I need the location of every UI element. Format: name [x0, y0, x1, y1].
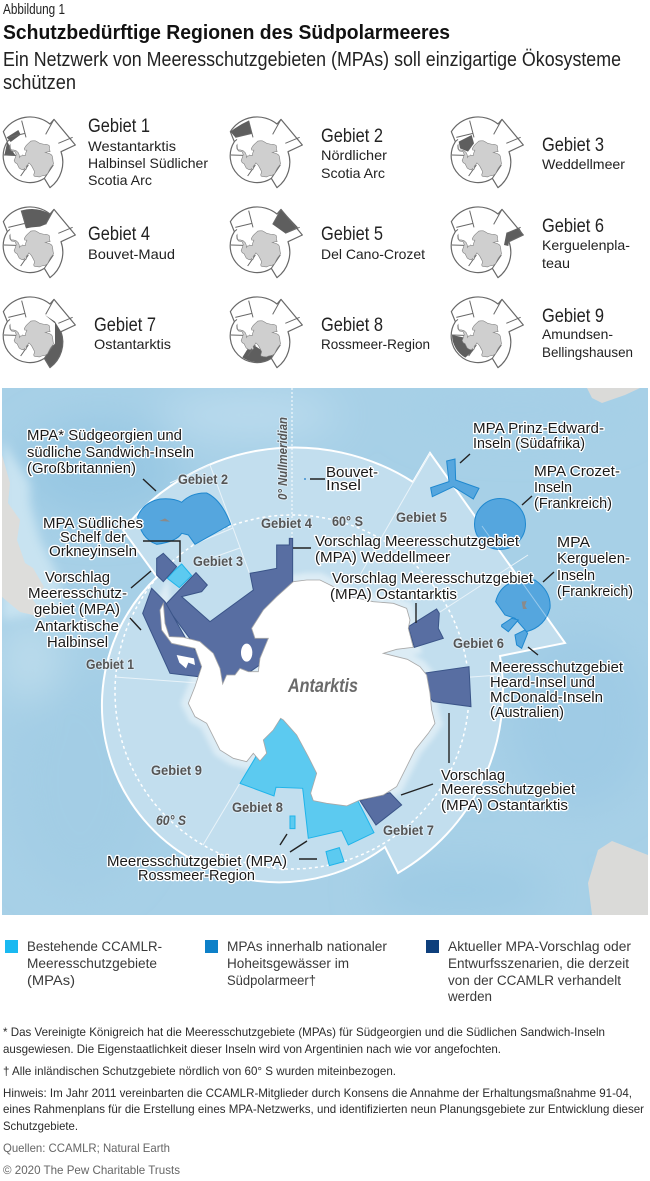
area labels: Gebiet 3: [193, 554, 243, 569]
note: eines Rahmenplans für die Erstellung eines MPA-Netzwerks, und identifizierten neun Planungsgebiete zur Entwicklung dieser: [3, 1102, 644, 1116]
proposed MPA: Orkney: [157, 553, 177, 582]
footnote: asterisk: [3, 1025, 605, 1056]
callout: Rossmeer: Meeresschutzgebiet (MPA): [107, 854, 287, 870]
callout: Kerguelen: MPA: [557, 535, 590, 551]
region boundary over Crozet and Kerguelen: [482, 526, 547, 618]
MPA: Ross Sea: [240, 717, 374, 845]
callout: Crozet: [534, 464, 620, 512]
callout: Antarktische Halbinsel: Antarktische: [35, 619, 119, 635]
callout: Heard and McDonald: McDonald-Inseln: [490, 690, 603, 706]
locator: Gebiet 2: [230, 117, 387, 188]
callout: Kerguelen: [557, 535, 633, 600]
callout: Bouvet: Bouvet-: [326, 465, 378, 481]
note: Schutzgebiete.: [3, 1119, 78, 1133]
locator: Gebiet 7: Ostantarktis: [94, 336, 171, 352]
subtitle: schützen: [3, 72, 76, 94]
callout: Weddellmeer: (MPA) Weddellmeer: [315, 550, 450, 566]
locator: Gebiet 3: [451, 117, 625, 188]
60 degree south line: [115, 515, 469, 869]
latitude labels: [156, 514, 363, 828]
map of the Southern Ocean: [0, 385, 650, 915]
region boundary: [102, 448, 565, 882]
panel: region key: [3, 115, 633, 368]
locator: Gebiet 9: Gebiet 9: [542, 305, 604, 327]
Bouvet island: [304, 478, 306, 480]
callout: Orkney: Schelf der: [60, 530, 126, 546]
footnotes: [3, 1025, 644, 1177]
callout: Ostantarktis north: [330, 571, 533, 603]
callout: Orkney: Orkneyinseln: [49, 544, 137, 560]
callout: Antarktische Halbinsel: [28, 570, 127, 651]
callout: Bouvet: Insel: [326, 478, 361, 494]
island: South Georgia: [159, 518, 170, 522]
locator: Gebiet 9: Amundsen-: [542, 326, 613, 342]
locator: Gebiet 6: [451, 207, 630, 278]
callout: Südgeorgien: (Großbritannien): [27, 461, 136, 477]
callout: Heard and McDonald: Meeresschutzgebiet: [490, 660, 623, 676]
callout: Bouvet: [326, 465, 378, 494]
locator: Gebiet 5: Gebiet 5: [321, 223, 383, 245]
callout: Heard and McDonald: (Australien): [490, 705, 564, 721]
legend: proposed MPAs: Aktueller MPA-Vorschlag oder: [448, 939, 632, 954]
callout: Ostantarktis south: Vorschlag: [441, 768, 505, 784]
sources: Quellen: CCAMLR; Natural Earth: [3, 1141, 170, 1155]
locator: Gebiet 2: Scotia Arc: [321, 165, 385, 181]
coastal shelf: [160, 580, 435, 806]
MPA: Prinz-Edward-Inseln: [431, 459, 479, 499]
callout: Ostantarktis south: Meeresschutzgebiet: [441, 782, 575, 798]
legend: existing CCAMLR MPAs: Bestehende CCAMLR-: [27, 939, 162, 954]
area labels: Gebiet 9: [151, 763, 202, 778]
callout: Prinz-Edward: Inseln (Südafrika): [473, 436, 585, 452]
legend: proposed MPAs: [426, 939, 632, 1004]
subtitle: [3, 49, 621, 94]
legend: proposed MPAs: werden: [447, 989, 492, 1004]
island: Kerguelen: [522, 601, 527, 609]
callout: Weddellmeer: [315, 534, 519, 566]
locator: Gebiet 2: Gebiet 2: [321, 125, 383, 147]
callout: Ostantarktis north: Vorschlag Meeresschutzgebiet: [332, 571, 533, 587]
callout: Rossmeer: [107, 854, 287, 884]
locator: Gebiet 9: [451, 297, 633, 368]
footnote: asterisk: ausgewiesen. Die Eigenstaatlichkeit dieser Inseln wird von Argentinien nach wie vor angefochten.: [3, 1042, 501, 1056]
locator: Gebiet 6: Gebiet 6: [542, 215, 604, 237]
leader lines: [130, 454, 554, 859]
proposed MPA: Antarktische Halbinsel: [143, 588, 203, 677]
callout: Ostantarktis south: [441, 768, 575, 814]
note: Hinweis: Im Jahr 2011 vereinbarten die CCAMLR-Mitglieder durch Konsens die Annahme der Erhaltungsmaßnahme 91-04,: [3, 1086, 632, 1100]
area labels: Gebiet 1: [86, 657, 134, 672]
proposed MPA: Ostantarktis north: [408, 609, 443, 647]
callout: Orkney: [43, 516, 143, 560]
locator: Gebiet 5: Del Cano-Crozet: [321, 246, 425, 262]
prime meridian: [292, 388, 293, 538]
callout: Kerguelen: Inseln: [557, 568, 595, 584]
locator: Gebiet 8: Rossmeer-Region: [321, 336, 430, 352]
callout: Prinz-Edward: MPA Prinz-Edward-: [473, 421, 604, 437]
land: South America: [2, 455, 46, 618]
locator: Gebiet 8: [230, 297, 430, 368]
callout: Ostantarktis south: (MPA) Ostantarktis: [441, 798, 568, 814]
callout: Heard and McDonald: [490, 660, 623, 721]
locator: Gebiet 3: Gebiet 3: [542, 134, 604, 156]
callout: Südgeorgien: MPA* Südgeorgien und: [27, 428, 182, 444]
MPA: Heard-Insel und McDonald-Inseln: [502, 618, 528, 648]
South American shelf: [2, 440, 60, 620]
locator: Gebiet 5: [230, 207, 425, 278]
ocean background: [2, 388, 648, 915]
footnote: dagger: † Alle inländischen Schutzgebiete nördlich von 60° S wurden miteinbezogen.: [3, 1064, 396, 1078]
callout: Südgeorgien: südliche Sandwich-Inseln: [27, 445, 194, 461]
locator: Gebiet 6: Kerguelenpla-: [542, 237, 630, 253]
legend: national MPAs: [205, 939, 388, 988]
area labels: Gebiet 4: [261, 516, 312, 531]
legend: national MPAs: MPAs innerhalb nationaler: [227, 939, 388, 954]
area labels: Gebiet 7: [383, 823, 434, 838]
area labels: Gebiet 8: [232, 800, 283, 815]
callout: Heard and McDonald: Heard-Insel und: [490, 675, 595, 691]
locator: Gebiet 1: Scotia Arc: [88, 172, 152, 188]
MPA: Südgeorgien: [138, 493, 231, 544]
locator: Gebiet 6: teau: [542, 255, 570, 271]
callout: Crozet: Inseln: [534, 480, 572, 496]
place label: Antarktis: Antarktis: [287, 676, 358, 697]
locator: Gebiet 2: Nördlicher: [321, 147, 387, 163]
callout: Kerguelen: (Frankreich): [557, 584, 633, 600]
planning area lines: [115, 453, 528, 845]
callout: Antarktische Halbinsel: Halbinsel: [47, 635, 108, 651]
locator: Gebiet 1: Gebiet 1: [88, 115, 150, 137]
copyright: © 2020 The Pew Charitable Trusts: [3, 1163, 180, 1177]
legend: existing CCAMLR MPAs: [5, 939, 162, 988]
legend: national MPAs: Südpolarmeer†: [227, 973, 316, 988]
legend: proposed MPAs: von der CCAMLR verhandelt: [448, 973, 621, 988]
meridian label: 0° Nullmeridian: [276, 417, 290, 500]
callout: Prinz-Edward: [473, 421, 604, 452]
locator: Gebiet 7: [3, 297, 171, 368]
note: [3, 1086, 644, 1133]
MPA: Ross Sea small areas: [290, 816, 344, 866]
land: Africa: [587, 388, 640, 403]
MPA: Südliches Schelf der Orkneyinseln: [167, 564, 192, 588]
locator: Gebiet 9: Bellingshausen: [542, 344, 633, 360]
callout: Crozet: MPA Crozet-: [534, 464, 620, 480]
legend: [5, 939, 632, 1004]
locator: Gebiet 1: Halbinsel Südlicher: [88, 155, 208, 171]
proposed MPA: Ostantarktis middle: [418, 667, 471, 707]
locator: Gebiet 1: Westantarktis: [88, 138, 176, 154]
proposed MPA: Ostantarktis south: [360, 793, 402, 825]
locator: Gebiet 3: Weddellmeer: [542, 156, 625, 172]
callout: Antarktische Halbinsel: Meeresschutz-: [28, 586, 127, 602]
area labels: Gebiet 5: [396, 510, 447, 525]
title: Schutzbedürftige Regionen des Südpolarmeeres: [3, 21, 450, 44]
area labels: Gebiet 2: [178, 472, 228, 487]
MPA: Crozet-Inseln: [474, 498, 526, 550]
latitude labels: 60° S: [332, 514, 363, 529]
proposed MPA: Weddellmeer: [165, 538, 293, 688]
locator: Gebiet 8: Gebiet 8: [321, 314, 383, 336]
land: Australia: [588, 841, 648, 915]
locator: Gebiet 1: [3, 115, 208, 188]
footnote: asterisk: * Das Vereinigte Königreich hat die Meeresschutzgebiete (MPAs) für Südgeorgien und die Südlichen Sandwich-Inseln: [3, 1025, 605, 1039]
Antarctica: [160, 580, 435, 806]
callout: Orkney: MPA Südliches: [43, 516, 143, 532]
legend: national MPAs: Hoheitsgewässer im: [227, 956, 349, 971]
locator: Gebiet 4: Bouvet-Maud: [88, 246, 175, 262]
area labels: [86, 472, 504, 838]
callout: Weddellmeer: Vorschlag Meeresschutzgebiet: [315, 534, 519, 550]
area labels: Gebiet 6: [453, 636, 504, 651]
callout: Antarktische Halbinsel: gebiet (MPA): [34, 602, 120, 618]
callout: Rossmeer: Rossmeer-Region: [138, 868, 255, 884]
legend: proposed MPAs: Entwurfsszenarien, die derzeit: [448, 956, 629, 971]
latitude labels: 60° S: [156, 813, 186, 828]
locator: Gebiet 4: Gebiet 4: [88, 223, 150, 245]
callout: Kerguelen: Kerguelen-: [557, 551, 630, 567]
legend: existing CCAMLR MPAs: (MPAs): [27, 973, 75, 988]
MPA: Kerguelen-Inseln: [496, 580, 550, 632]
locator: Gebiet 7: Gebiet 7: [94, 314, 156, 336]
legend: existing CCAMLR MPAs: Meeresschutzgebiete: [27, 956, 157, 971]
callout: Ostantarktis north: (MPA) Ostantarktis: [330, 587, 457, 603]
locator: Gebiet 4: [3, 207, 175, 278]
callout: Südgeorgien: [27, 428, 194, 477]
callout: Crozet: (Frankreich): [534, 496, 612, 512]
callout: Antarktische Halbinsel: Vorschlag: [45, 570, 110, 586]
figure label: Abbildung 1: [3, 2, 65, 18]
